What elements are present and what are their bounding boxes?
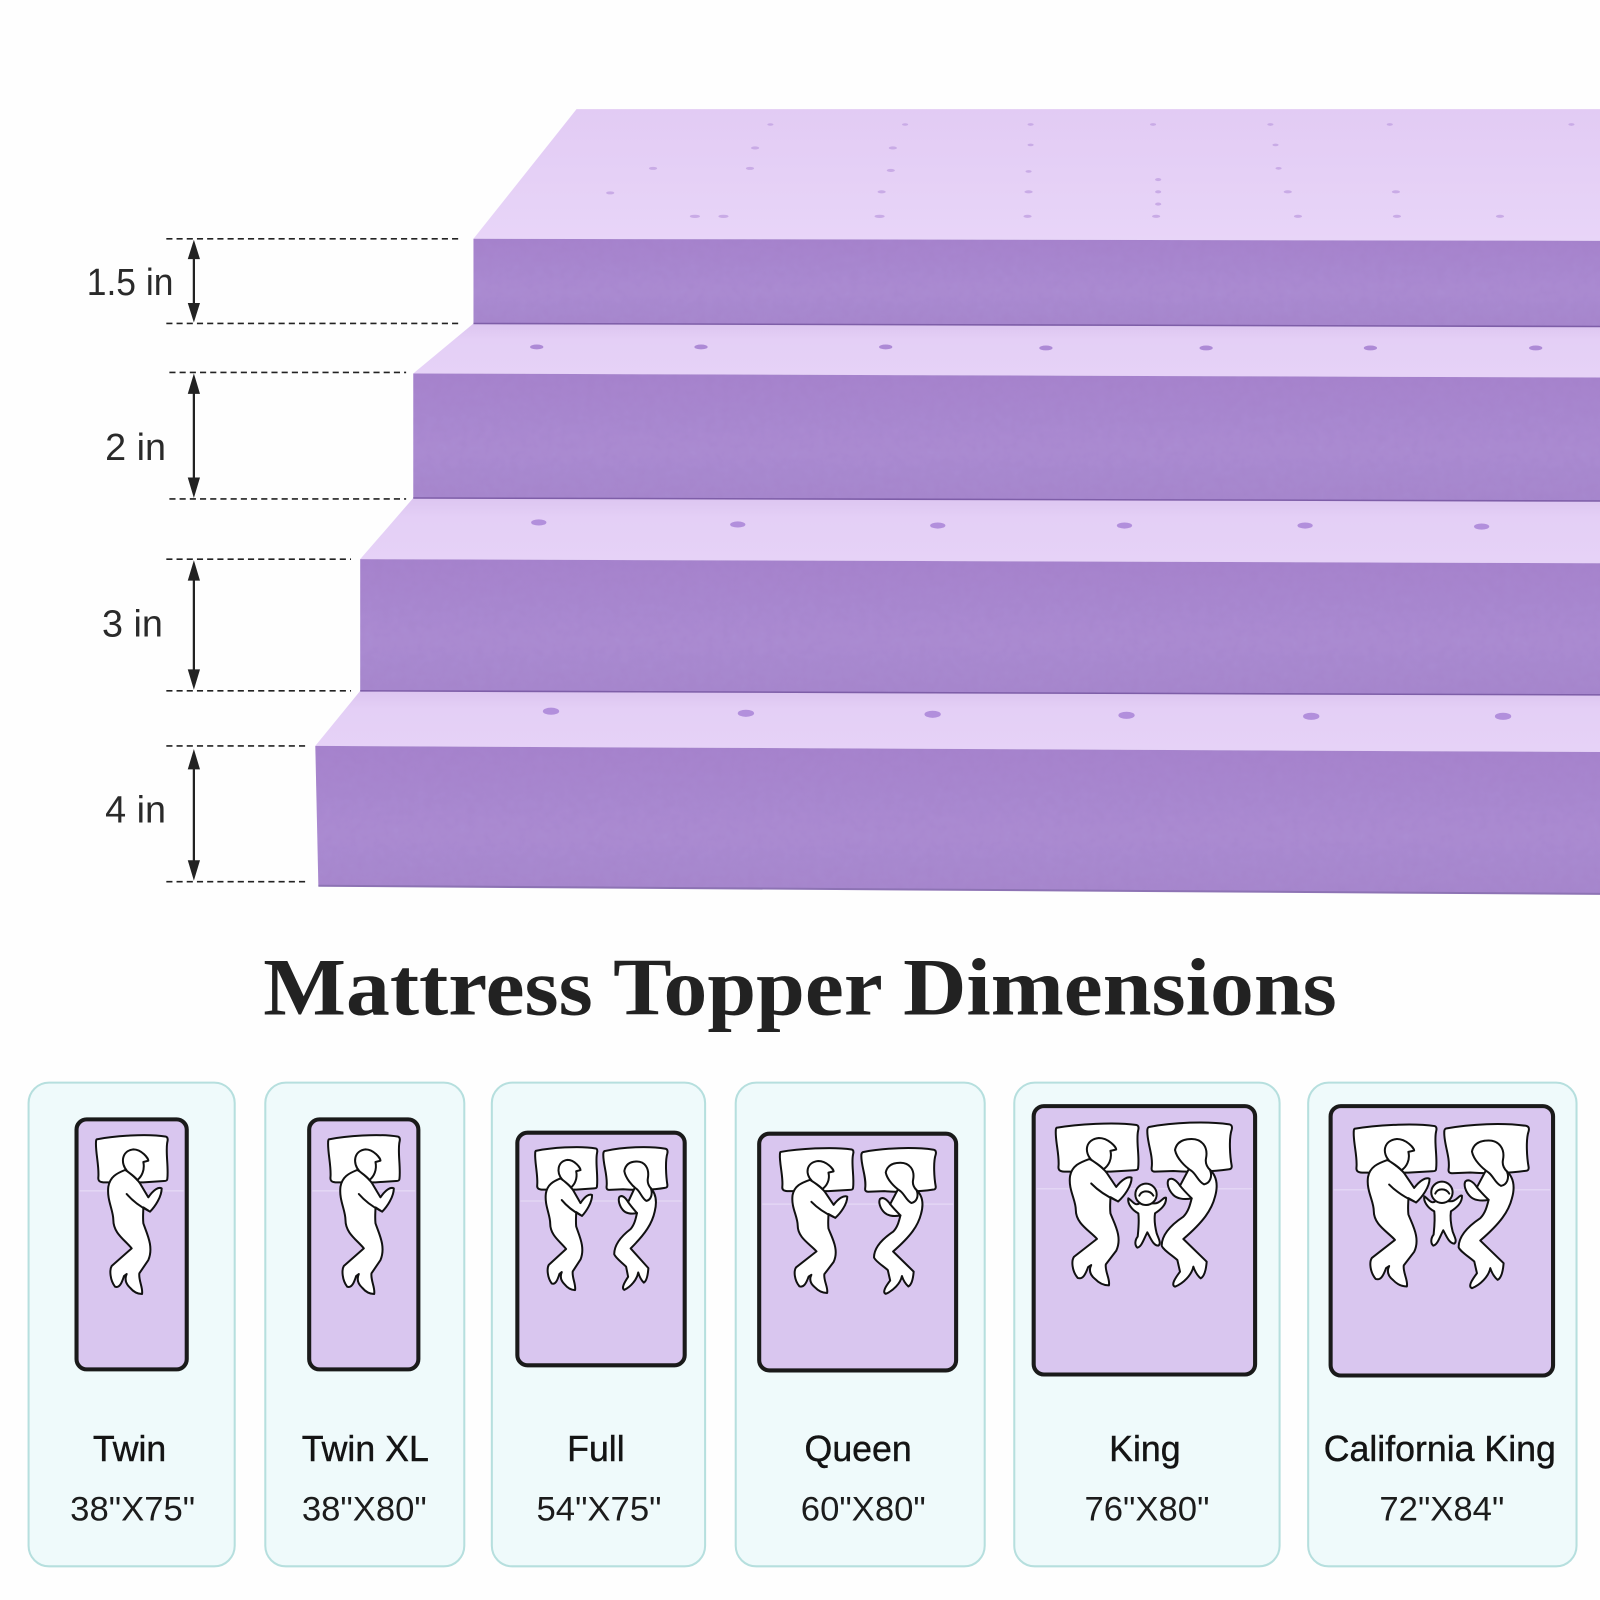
icon: sleeper on pillow (96, 1135, 168, 1294)
callout: 3 in: 3 in (102, 603, 163, 645)
icon: woman sleeper (1147, 1122, 1232, 1287)
icon: man sleeper (1354, 1125, 1437, 1286)
callout: 1.5 in (87, 239, 461, 323)
panel: Twin XL: Twin XL (302, 1429, 429, 1469)
panel: Full (492, 1083, 705, 1566)
slab: 3 in topper (360, 498, 1600, 695)
callout: 3 in (102, 559, 351, 691)
icon: woman sleeper (861, 1148, 936, 1294)
callout: 2 in: 2 in (105, 426, 166, 468)
panel: California King: California King (1324, 1429, 1556, 1469)
panel: Full: 54"X75" (537, 1490, 661, 1528)
slab: 4 in topper (315, 691, 1600, 894)
icon: woman sleeper (1444, 1124, 1529, 1288)
panel: California King (1308, 1083, 1577, 1566)
panel: Twin: Twin (93, 1429, 166, 1469)
panel: Queen: Queen (805, 1429, 912, 1469)
panel: Twin XL: 38"X80" (302, 1490, 427, 1528)
thickness callouts (87, 239, 461, 882)
slab: 2 in topper (413, 323, 1600, 501)
panel: King: 76"X80" (1084, 1490, 1209, 1528)
icon: woman sleeper (603, 1147, 668, 1290)
illustration: stacked foam toppers (315, 109, 1600, 894)
panel: King (1014, 1083, 1280, 1566)
panel: Twin: 38"X75" (70, 1490, 195, 1528)
panel: California King: 72"X84" (1379, 1490, 1504, 1528)
title: Mattress Topper Dimensions (263, 941, 1337, 1032)
panel: Twin XL (265, 1083, 464, 1566)
panel: Queen (736, 1083, 985, 1566)
panel: Full: Full (567, 1429, 625, 1469)
icon: man sleeper (535, 1147, 597, 1290)
icon: baby (1424, 1182, 1462, 1246)
panel: King: King (1109, 1429, 1181, 1469)
callout: 4 in: 4 in (105, 788, 166, 830)
icon: baby (1128, 1184, 1166, 1248)
icon: sleeper on pillow (328, 1135, 400, 1294)
icon: man sleeper (780, 1148, 853, 1293)
slab: 1.5 in topper (473, 109, 1600, 327)
panel: Twin (29, 1083, 235, 1566)
callout: 4 in (105, 746, 307, 882)
panel: Queen: 60"X80" (801, 1490, 926, 1528)
callout: 1.5 in: 1.5 in (87, 261, 173, 303)
callout: 2 in (105, 372, 406, 499)
icon: man sleeper (1056, 1123, 1139, 1285)
